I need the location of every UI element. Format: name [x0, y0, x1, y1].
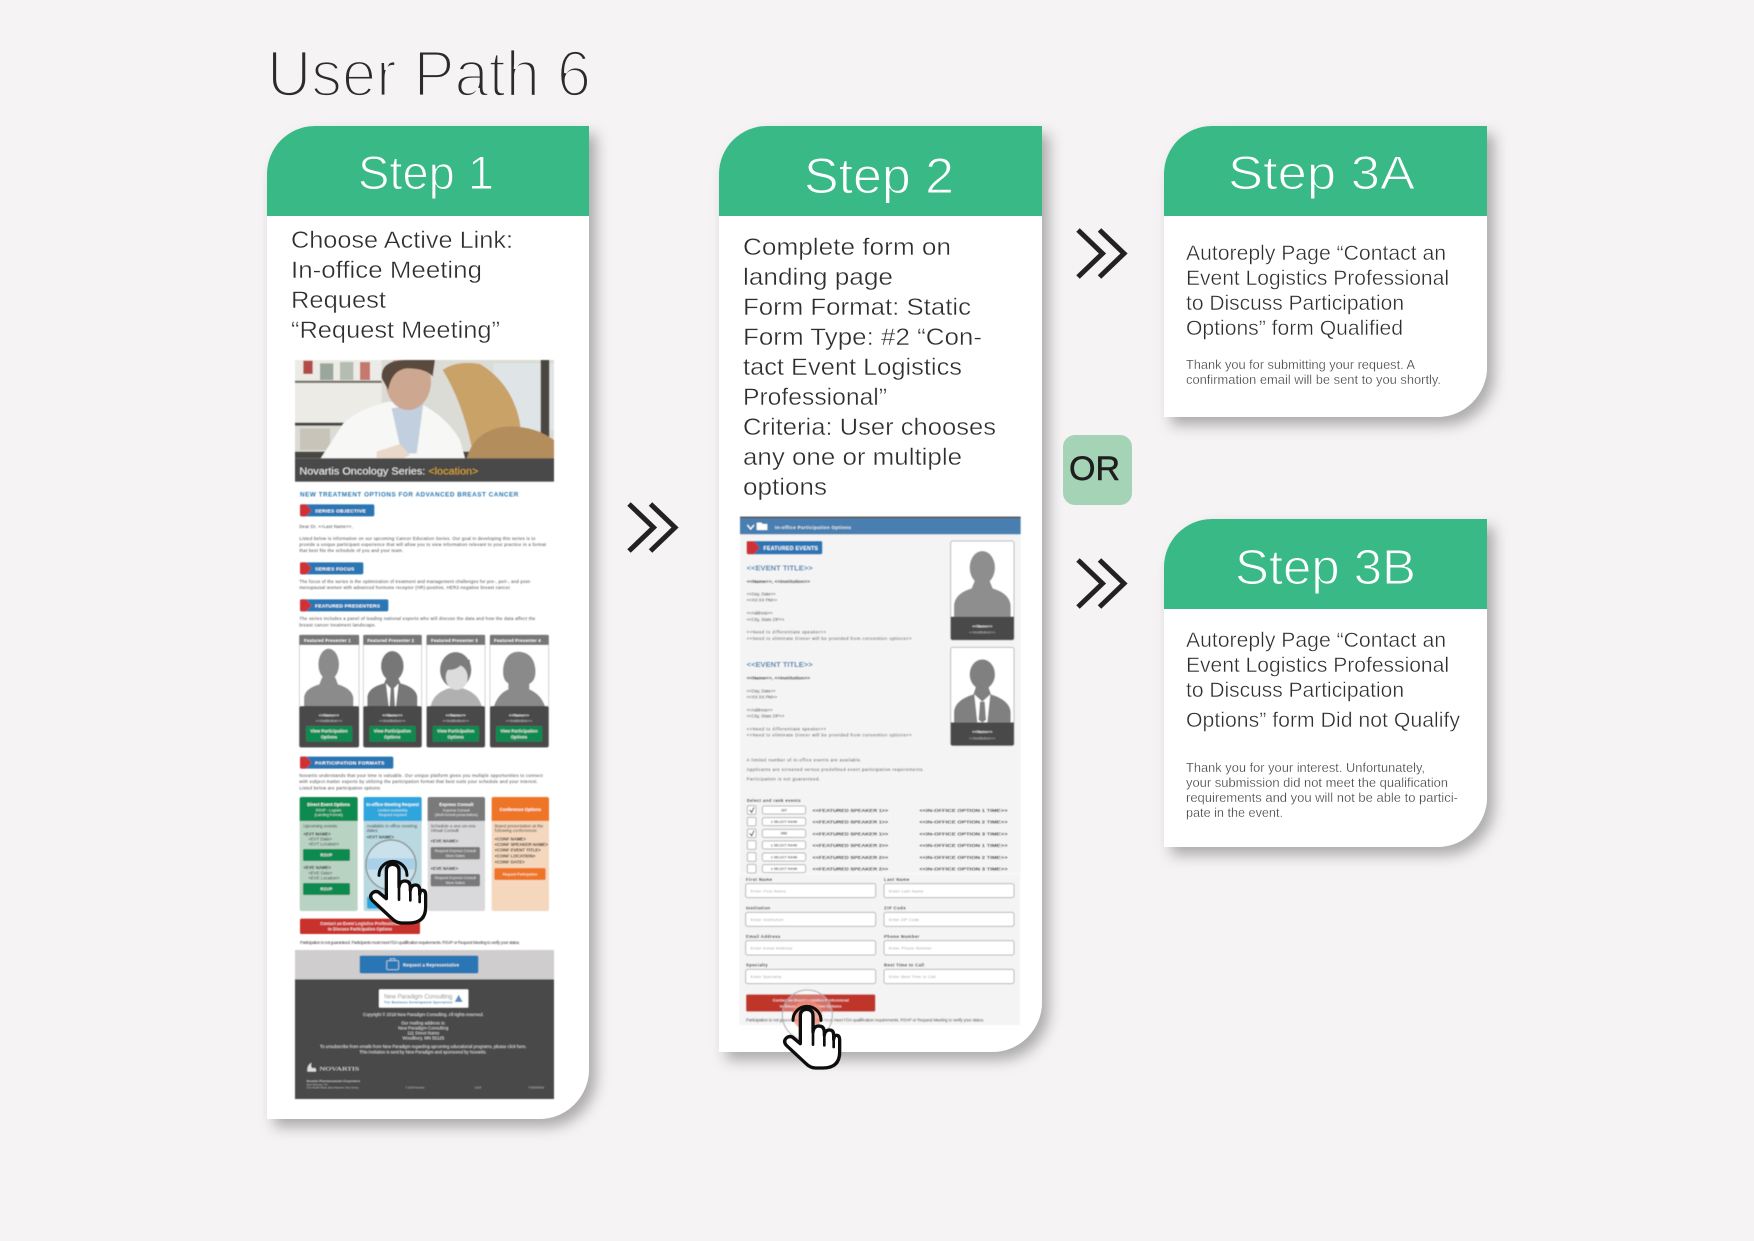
step 2 card background [719, 126, 1042, 1052]
presenter card 1: Options [321, 735, 338, 740]
presenter card 2: Options [384, 735, 401, 740]
specialty and call time fields [746, 963, 1014, 984]
step 3B description: Options” form Did not Qualify [1186, 709, 1461, 732]
dark footer: Our mailing address is: [401, 1020, 445, 1025]
rank events table: <<IN-OFFICE OPTION 3 TIME>> [919, 831, 1008, 837]
step 3B rejection text: Thank you for your interest. Unfortunately, [1186, 760, 1425, 775]
event 1 details: <<Address>> [747, 611, 773, 616]
event 1 details: <<Name>>, <<Institution>> [747, 579, 810, 584]
rank events table: ∨ SELECT RANK [770, 855, 798, 859]
step 1 description: “Request Meeting” [291, 317, 500, 344]
presenter card 2: Featured Presenter 2 [367, 638, 415, 643]
specialty and call time fields: Enter Specialty [751, 974, 781, 979]
OR badge [1063, 435, 1132, 505]
hero caption band: Novartis Oncology Series: [299, 467, 425, 478]
institution and zip fields: ZIP Code [884, 905, 906, 910]
first and last name fields: First Name [746, 877, 773, 882]
dark footer: © 2018 Novartis [405, 1086, 425, 1090]
event 1 details: <<Need to eliminate Dinner will be provided from convention options>> [747, 636, 912, 641]
step 2 description: Form Format: Static [743, 294, 971, 321]
tag: series objective [300, 504, 374, 516]
email and phone fields: Email Address [746, 934, 781, 939]
rank events table: <<IN-OFFICE OPTION 1 TIME>> [919, 843, 1008, 849]
option column: in-office meeting: <EVT NAME> [367, 835, 395, 840]
step 3A description: Options” form Qualified [1186, 317, 1403, 340]
OR badge: OR [1069, 450, 1120, 488]
tag: participation formats: PARTICIPATION FORMATS [315, 761, 385, 767]
step 3B rejection text: your submission did not meet the qualification [1186, 775, 1448, 790]
disclaimer: Participation is not guaranteed. Participants must meet FDA qualification requirements. RSVP or Request Meeting to verify your status. [300, 940, 520, 945]
greeting and intro: Dear Dr. <<Last Name>>, [299, 524, 353, 529]
panel: step 3A [1164, 126, 1487, 417]
presenters text [299, 616, 536, 627]
event selection panel [740, 517, 1021, 873]
speaker card 2: <<Institution>> [969, 735, 996, 740]
representative band [295, 950, 554, 979]
rank events table: <<FEATURED SPEAKER 2>> [812, 855, 888, 861]
presenter card 4: <<Institution>> [506, 718, 533, 723]
tag: series focus [300, 562, 363, 574]
specialty and call time fields: Best Time to Call [884, 963, 924, 968]
icon: pointing hand, step 1 [371, 861, 426, 923]
tag: participation formats [300, 757, 393, 769]
option column: direct event: RSVP - Logistic [316, 808, 342, 812]
form disclaimer: Participation is not guaranteed. Participants must meet FDA qualification requirements. RSVP or Request Meeting to verify your status. [746, 1017, 984, 1022]
option column: conference: <CONF EVENT TITLE> [495, 848, 541, 853]
contact form [739, 874, 1020, 1040]
option column: direct event: (Landing Format) [315, 813, 343, 817]
option column: conference: Request Participation [503, 873, 537, 877]
step 3A confirmation text: Thank you for submitting your request. A [1186, 357, 1415, 372]
rank events table: <<FEATURED SPEAKER 2>> [812, 867, 888, 873]
tag: featured events [747, 541, 822, 554]
presenter card 1: View Participation [310, 729, 348, 734]
option column: direct event: <EVE Date> [308, 870, 333, 875]
option column: direct event: <EVT Location> [308, 842, 340, 847]
option column: conference: <CONF SPEAKER NAME> [495, 842, 549, 847]
option column: conference: Brand presentation at the [495, 823, 544, 828]
rank events table: ∨ SELECT RANK [770, 867, 798, 871]
option column: conference: <CONF NAME> [495, 837, 526, 842]
dark footer [295, 979, 554, 1099]
presenter card 4 [490, 635, 549, 747]
step 2 description: Professional” [743, 384, 887, 411]
step 3B description: Event Logistics Professional [1186, 654, 1449, 677]
panel title bar [740, 517, 1021, 534]
red contact button: Contact an Event Logistics Professional [320, 921, 400, 926]
rank events table: ∨ SELECT RANK [770, 820, 798, 824]
red submit button: to Discuss Participation Options [780, 1004, 842, 1009]
presenter card 4: <<Name>> [509, 712, 530, 717]
presenter card 2: <<Name>> [382, 712, 403, 717]
arrow: step 1 to step 2 [629, 504, 675, 551]
step 2 description: Criteria: User chooses [743, 414, 996, 441]
option column: direct event: <EVE Location> [308, 875, 340, 880]
presenter card 1: <<Name>> [319, 712, 340, 717]
event 1 details: <<Day, Date>> [747, 592, 776, 597]
red contact button [300, 919, 420, 934]
option column: direct event: RSVP [320, 887, 332, 892]
presenter card 3: <<Institution>> [442, 718, 470, 723]
presenter card 2 [363, 635, 422, 747]
speaker card 1 [951, 541, 1014, 640]
presenter card 4: View Participation [500, 729, 538, 734]
step 3A description: Event Logistics Professional [1186, 267, 1449, 290]
rank events table: 2ND [781, 832, 788, 836]
option column: express consult: <EVE NAME> [431, 866, 459, 871]
series focus text: menopausal women with advanced hormone receptor (HR)-positive, HER2-negative breast cancer. [299, 585, 511, 590]
rank events table: <<IN-OFFICE OPTION 2 TIME>> [919, 820, 1008, 826]
option column: conference: following conferences: [495, 828, 537, 833]
panel: step 1 [267, 126, 589, 1119]
availability note: A limited number of in-office events are available. [747, 758, 862, 763]
participation intro: Listed below are participation options: [299, 785, 381, 790]
event 1 details [747, 563, 912, 641]
availability note [747, 758, 924, 782]
step 3A description: to Discuss Participation [1186, 292, 1404, 315]
step 1 description: Request [291, 287, 386, 314]
option column: express consult [428, 797, 485, 911]
availability note: Applicants are screened versus predefined event participation requirements. [747, 767, 924, 772]
event 2 details: <<Need to eliminate Dinner will be provided from convention options>> [747, 733, 912, 738]
red submit button: Contact an Event Logistics Professional [773, 998, 849, 1003]
panel: step 2 [719, 126, 1042, 1068]
step 2 description: Form Type: #2 “Con- [743, 324, 982, 351]
email and phone fields [746, 934, 1014, 955]
arrow: step 2 to step 3A [1078, 230, 1124, 277]
participation intro: with subject matter experts by utilizing the participation format that best suits your schedule and your interest. [299, 779, 538, 784]
speaker card 1: <<Name>> [972, 623, 993, 628]
presenter card 3: <<Name>> [446, 712, 466, 717]
rank events table: Select and rank events [747, 798, 801, 803]
presenter card 3: Options [447, 735, 464, 740]
presenters text: breast cancer treatment landscape. [299, 622, 376, 627]
dark footer: East Hanover, NJ [307, 1082, 328, 1086]
step 2 header [719, 126, 1042, 216]
option column: direct event [300, 797, 358, 911]
option column: direct event: <EVT NAME> [303, 831, 331, 836]
event 2 details: <<Day, Date>> [747, 688, 776, 693]
option column: express consult: (Multi-format presentation) [435, 813, 478, 817]
step 2 description: any one or multiple [743, 444, 962, 471]
option column: conference [492, 797, 549, 911]
tag: series focus: SERIES FOCUS [315, 566, 355, 572]
presenter card 4: Featured Presenter 4 [494, 638, 541, 643]
step 3B description: to Discuss Participation [1186, 679, 1404, 702]
step 2 description: Complete form on [743, 234, 951, 261]
presenter card 2: View Participation [374, 729, 411, 734]
option column: in-office meeting: In-office Meeting Request [366, 802, 420, 807]
arrow: step 2 to step 3B [1078, 560, 1124, 607]
step 1 header [267, 126, 589, 216]
hero photo [295, 353, 554, 458]
event 2 details: <<EVENT TITLE>> [747, 660, 813, 669]
institution and zip fields: Institution [746, 905, 771, 910]
rank events table: 1ST [781, 808, 787, 812]
option column: in-office meeting: Available in-office meeting [367, 823, 418, 828]
tag: featured presenters [300, 599, 388, 611]
step 2 description: landing page [743, 264, 893, 291]
step 3A header [1164, 126, 1487, 216]
option column: express consult: <EVE NAME> [431, 839, 459, 844]
presenter card 4: Options [511, 735, 528, 740]
option column: direct event: RSVP [320, 853, 332, 858]
option column: direct event: Direct Event Options [307, 802, 351, 807]
first and last name fields [746, 877, 1014, 898]
email lower section [295, 757, 554, 1099]
rank events table: <<FEATURED SPEAKER 1>> [812, 831, 888, 837]
dark footer: 11/18 [475, 1086, 482, 1090]
step 1 card background [267, 126, 589, 1119]
greeting and intro: provide a unique participant experience that will allow you to view information relevant to your practice in a format [299, 542, 547, 547]
event 1 details: <<City, State ZIP>> [747, 617, 785, 622]
greeting and intro: Listed below is information on our upcoming Cancer Education Series. Our goal in developing this series is to [299, 536, 536, 541]
step 2 description: options [743, 474, 827, 501]
tag: series objective: SERIES OBJECTIVE [315, 508, 366, 514]
option column: express consult: Virtual Consult [431, 828, 460, 833]
step 3A description [1186, 242, 1449, 340]
presenter card 1 [299, 635, 359, 747]
speaker card 2: <<Name>> [972, 729, 993, 734]
option column: express consult: More Dates [446, 881, 465, 885]
email upper section [295, 353, 554, 747]
option column: in-office meeting: dates: [367, 828, 378, 833]
specialty and call time fields: Enter Best Time to Call [889, 974, 936, 979]
event 2 details: <<Need to differentiate speaker>> [747, 726, 826, 731]
rank events table: <<FEATURED SPEAKER 1>> [812, 808, 888, 814]
institution and zip fields: Enter ZIP Code [889, 917, 920, 922]
title: User Path 6 [267, 38, 591, 110]
series focus text: The focus of the series is the optimization of treatment and management challenges for pre-, peri-, and post- [299, 579, 532, 584]
dark footer: Copyright © 2018 New Paradigm Consulting. All rights reserved. [363, 1012, 484, 1017]
greeting and intro: that best fits the schedule of you and your team. [299, 548, 403, 553]
tap ripple [366, 840, 416, 890]
tag: featured events: FEATURED EVENTS [763, 546, 818, 552]
form landing page screenshot [739, 517, 1021, 1040]
dark footer: T-000000000 [528, 1086, 545, 1090]
option column: conference: <CONF LOCATION> [495, 853, 536, 858]
step 3A confirmation text [1186, 357, 1441, 387]
dark footer: To unsubscribe from emails from New Paradigm regarding upcoming educational programs, please click here. [320, 1044, 527, 1049]
event 1 details: <<Need to differentiate speaker>> [747, 630, 826, 635]
institution and zip fields: Enter Institution [751, 917, 783, 922]
option column: express consult: Express Consult [443, 808, 470, 812]
tag: featured presenters: FEATURED PRESENTERS [315, 603, 381, 609]
dark footer: New Paradigm Consulting [398, 1025, 449, 1030]
rank events table: <<IN-OFFICE OPTION 3 TIME>> [919, 867, 1008, 873]
option column: in-office meeting: Limited availability [378, 808, 408, 812]
event 2 details: <<Name>>, <<Institution>> [747, 676, 810, 681]
email and phone fields: Enter Phone Number [889, 945, 932, 950]
panel title bar: In-office Participation Options [775, 525, 851, 530]
option column: direct event: <EVE NAME> [303, 865, 331, 870]
step 3B card background [1164, 519, 1487, 847]
event 2 details: <<Address>> [747, 708, 773, 713]
step 1 description [291, 227, 513, 344]
rank events table: <<FEATURED SPEAKER 2>> [812, 843, 888, 849]
rank events table: <<IN-OFFICE OPTION 1 TIME>> [919, 808, 1008, 814]
event 2 details: <<XX:XX PM>> [747, 695, 778, 700]
presenter card 3: View Participation [437, 729, 475, 734]
option column: in-office meeting: Request required [379, 813, 407, 817]
option column: direct event: <EVT Date> [308, 837, 333, 842]
option column: conference: <CONF DATE> [495, 860, 525, 865]
step 3B description: Autoreply Page “Contact an [1186, 629, 1446, 652]
event 1 details: <<EVENT TITLE>> [747, 563, 813, 572]
dark footer: One Health Plaza, East Hanover, New Jersey [307, 1086, 359, 1090]
dark footer: Novartis Pharmaceuticals Corporation [307, 1079, 360, 1083]
email heading: NEW TREATMENT OPTIONS FOR ADVANCED BREAST CANCER [300, 491, 519, 498]
step 1 description: Choose Active Link: [291, 227, 513, 254]
rank events table [747, 798, 1008, 873]
dark footer: This invitation is sent by New Paradigm and sponsored by Novartis. [359, 1050, 487, 1055]
step 3A header: Step 3A [1228, 146, 1416, 199]
dark footer: Woodbury, MN 55125 [402, 1035, 445, 1040]
dark footer: New Paradigm Consulting [384, 995, 452, 1001]
participation intro [299, 773, 543, 790]
step 3B description [1186, 629, 1461, 732]
presenter card 3: Featured Presenter 3 [431, 638, 478, 643]
speaker card 2 [951, 647, 1014, 746]
step 3B header [1164, 519, 1487, 609]
event 2 details [747, 660, 912, 738]
greeting and intro [299, 524, 547, 553]
step 3B rejection text [1186, 760, 1458, 820]
panel: step 3B [1164, 519, 1487, 847]
step 3A card background [1164, 126, 1487, 417]
rank events table: <<IN-OFFICE OPTION 2 TIME>> [919, 855, 1008, 861]
option column: conference: Conference Options [500, 807, 542, 812]
presenter card 2: <<Institution>> [379, 718, 406, 723]
step 3B rejection text: pate in the event. [1186, 805, 1283, 820]
red contact button: to Discuss Participation Options [328, 926, 393, 931]
option column: express consult: Request Express Consult [435, 876, 476, 880]
option column: express consult: Schedule a one-on-one [431, 823, 476, 828]
hero caption band: <location> [428, 467, 479, 478]
step 3A description: Autoreply Page “Contact an [1186, 242, 1446, 265]
presenters text: The series includes a panel of leading national experts who will discuss the data and how the data affect the [299, 616, 536, 621]
first and last name fields: Enter First Name [751, 888, 786, 893]
speaker card 1: <<Institution>> [969, 630, 996, 635]
email and phone fields: Phone Number [884, 934, 920, 939]
step 2 description: tact Event Logistics [743, 354, 962, 381]
event 1 details: <<XX:XX PM>> [747, 598, 778, 603]
step 1 header: Step 1 [358, 146, 494, 199]
event 2 details: <<City, State ZIP>> [747, 714, 785, 719]
option column: express consult: Express Consult [439, 802, 474, 807]
option column: direct event: Upcoming events: [303, 823, 338, 828]
email landing page screenshot [295, 353, 554, 1099]
option column: express consult: More Dates [446, 854, 465, 858]
specialty and call time fields: Specialty [746, 963, 768, 968]
step 3B rejection text: requirements and you will not be able to partici- [1186, 790, 1458, 805]
participation intro: Novartis understands that your time is valuable. Our unique platform gives you multiple opportunities to connect [299, 773, 543, 778]
red submit button [746, 994, 875, 1012]
first and last name fields: Enter Last Name [889, 888, 924, 893]
step 3A confirmation text: confirmation email will be sent to you shortly. [1186, 372, 1441, 387]
tap ripple [782, 990, 832, 1040]
representative band: Request a Representative [403, 963, 460, 968]
icon: pointing hand, step 2 [785, 1006, 840, 1068]
series focus text [299, 579, 532, 590]
rank events table: ∨ SELECT RANK [770, 843, 798, 847]
presenter card 1: <<Institution>> [316, 718, 343, 723]
option column: express consult: Request Express Consult [435, 849, 476, 853]
hero caption band [295, 458, 554, 482]
dark footer: 111 Street Name [407, 1030, 440, 1035]
dark footer: The Business Development Specialists [384, 1000, 453, 1004]
first and last name fields: Last Name [884, 877, 910, 882]
presenter card 1: Featured Presenter 1 [304, 638, 351, 643]
dark footer: NOVARTIS [319, 1067, 359, 1073]
step 1 description: In-office Meeting [291, 257, 482, 284]
email and phone fields: Enter Email Address [751, 945, 792, 950]
step 2 description [743, 234, 996, 501]
institution and zip fields [746, 905, 1014, 926]
option column: in-office meeting [364, 797, 422, 911]
presenter card 3 [427, 635, 485, 747]
step 2 header: Step 2 [804, 148, 954, 204]
rank events table: <<FEATURED SPEAKER 1>> [812, 820, 888, 826]
step 3B header: Step 3B [1235, 541, 1416, 595]
availability note: Participation is not guaranteed. [747, 777, 820, 782]
